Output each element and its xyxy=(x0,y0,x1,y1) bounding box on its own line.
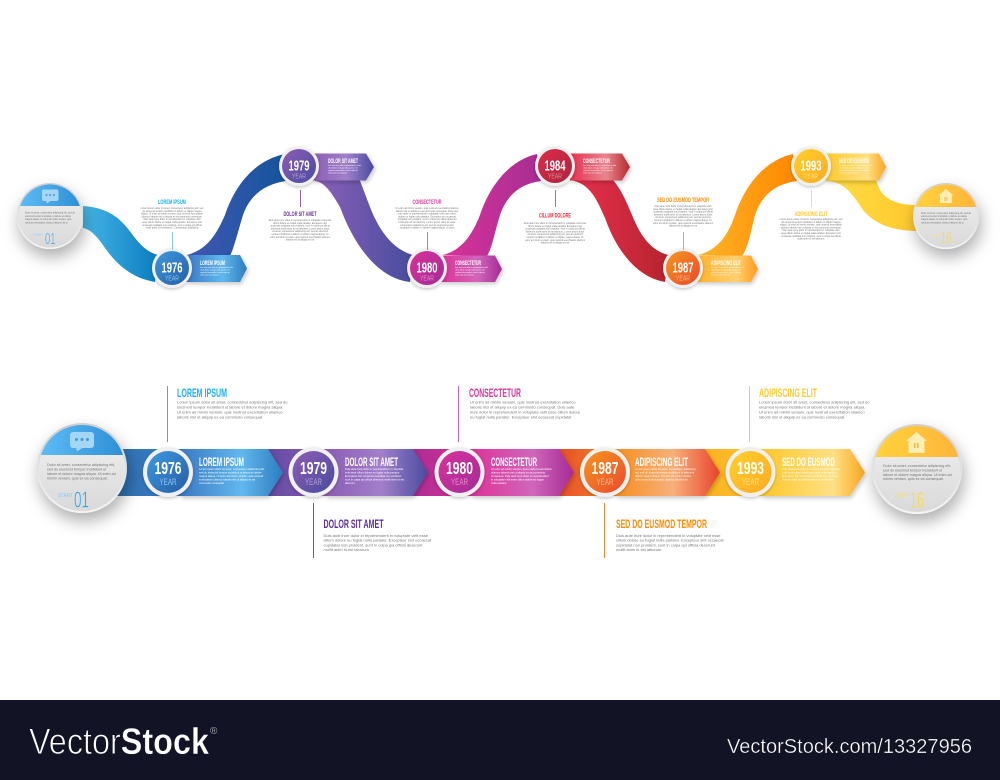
year node 1984: YEAR xyxy=(548,174,562,180)
arrow tag: dolor sit amet: DOLOR SIT AMET xyxy=(328,158,358,165)
label: dolor sit amet: cillum dolore eu fugiat nulla pariatur. Excepteur sint xyxy=(273,222,327,225)
callout: dolor sit amet: DOLOR SIT AMET xyxy=(324,517,384,531)
arrow tag: adipiscing elit: ADIPISCING ELIT xyxy=(711,260,741,267)
year node 1976 large: 1976 xyxy=(154,458,182,478)
arrow tag: consectetur: cillum dolore eu fugiat nulla pariatur sint xyxy=(455,268,485,272)
arrow: consectetur: nulla pariatur xyxy=(491,481,507,485)
end circle bottom: minim veniam, quis ex ea consequat. xyxy=(883,477,944,481)
end circle top: nostrud exercitation ullamco laboris nisi ut xyxy=(921,221,964,224)
label: dolor sit amet xyxy=(269,190,332,242)
label: consectetur xyxy=(395,199,459,250)
start circle bottom: sed do eiusmod tempor incididunt ut xyxy=(47,468,106,472)
label: consectetur: CONSECTETUR xyxy=(412,199,442,206)
end circle top: Dolor sit amet, consectetur adipiscing elit, sed do xyxy=(921,212,972,215)
year node 1979 large: YEAR xyxy=(305,477,322,487)
arrow tag: consectetur: cupidatat non proident, sunt in culpa qui xyxy=(455,271,485,274)
callout: dolor sit amet: cupidatat non proident, sunt in culpa qui officia deserunt xyxy=(324,542,423,548)
arrow tag: consectetur upper: mollit anim id est laborum xyxy=(583,172,603,174)
label: dolor sit amet: DOLOR SIT AMET xyxy=(284,211,317,218)
label: adipiscing elit: Lorem ipsum dolor sit amet, consectetur adipiscing elit, sed xyxy=(780,218,843,221)
start circle top: Dolor sit amet, consectetur adipiscing elit, sed do xyxy=(25,212,76,214)
label: dolor sit amet: occaecat cupidatat non proident, sunt in culpa qui officia xyxy=(270,225,330,228)
icon: speech bubble xyxy=(42,190,58,204)
arrow: adipiscing elit: quis nostrud exercitation ullamco laboris nisi xyxy=(635,478,688,482)
arrow tag: lorem ipsum xyxy=(186,255,247,282)
arrow tag: sed do eusmod: cillum dolore eu fugiat nulla pariatur sint xyxy=(839,166,869,170)
year node 1980 xyxy=(407,248,447,288)
label: lorem ipsum: do eiusmod tempor incididunt ut labore et dolore magna xyxy=(142,210,202,213)
label: sed do eusmod tempor: tempor incididunt ut labore et dolore magna aliqua. Ut xyxy=(655,219,712,222)
end circle top: euismod tempor incididunt ut labore et dolore xyxy=(921,215,968,218)
year node 1976: YEAR xyxy=(165,276,179,282)
label: lorem ipsum: occaecat cupidatat non proident, sunt in culpa qui officia xyxy=(142,224,202,227)
callout: lorem ipsum: laboris nisi ut aliquip ex ea commodo consequat. xyxy=(177,414,263,420)
label: sed do eusmod tempor: occaecat cupidatat non proident, sunt in culpa qui officia xyxy=(653,211,713,214)
callout: adipiscing elit: eiusmod tempor incididunt ut labore et dolore magna aliqua. xyxy=(759,404,865,410)
label: cillum dolore: occaecat cupidatat non proident, sunt in culpa qui officia xyxy=(525,228,585,231)
arrow: lorem ipsum: LOREM IPSUM xyxy=(199,457,244,469)
label: cillum dolore: laboris nisi ut aliquip ex ea xyxy=(541,242,570,245)
end circle bottom: sed do eiusmod tempor incididunt ut xyxy=(883,468,942,472)
arrow: lorem ipsum: Lorem ipsum dolor sit amet, consectetur adipiscing elit, xyxy=(199,467,265,471)
label: sed do eusmod tempor: Duis aute irure dolor in reprehenderit in voluptate velit xyxy=(655,205,712,208)
callout: lorem ipsum: eiusmod tempor incididunt ut labore et dolore magna aliqua. xyxy=(177,404,283,410)
arrow tag: dolor sit amet: Duis aute irure dolor in reprehenderit in velit xyxy=(328,164,361,167)
arrow: dolor sit amet xyxy=(325,449,428,496)
label: consectetur: mollit anim id est laborum. Lorem ipsum dolor sit amet, xyxy=(398,221,456,224)
callout: adipiscing elit: laboris nisi ut aliquip ex ea commodo consequat. xyxy=(759,414,845,420)
arrow: adipiscing elit xyxy=(616,449,720,496)
year node 1984: 1984 xyxy=(544,158,566,174)
arrow: sed do eusmod xyxy=(761,449,865,496)
callout: consectetur: eu fugiat nulla pariatur. Excepteur sint occaecat cupidatat xyxy=(470,414,572,420)
arrow tag: adipiscing elit: cupidatat non proident, sunt in culpa qui xyxy=(711,271,741,274)
arrow tag: dolor sit amet: cillum dolore eu fugiat nulla pariatur sint xyxy=(328,166,358,170)
start circle top: START xyxy=(33,233,44,237)
start circle bottom: Dolor sit amet, consectetur adipiscing elit, xyxy=(47,463,115,467)
label: consectetur: cupidatat non proident, sunt in culpa qui officia deserunt xyxy=(397,218,457,221)
year node 1980: YEAR xyxy=(420,276,434,282)
callout: lorem ipsum: Lorem ipsum dolor sit amet, consectetur adipiscing elit, sed do xyxy=(177,400,288,404)
arrow: lorem ipsum: exercitation ullamco laboris nisi ut aliquip ex ea xyxy=(199,478,256,482)
callout: consectetur: CONSECTETUR xyxy=(469,386,521,400)
label: cillum dolore: enim ad minim veniam, quis nostrud exercitation ullamco xyxy=(525,239,586,242)
callout: adipiscing elit: ADIPISCING ELIT xyxy=(759,386,817,400)
year node 1980: 1980 xyxy=(416,260,438,276)
label: dolor sit amet: deserunt mollit anim id est laborum. Lorem ipsum dolor xyxy=(271,227,329,230)
label: cillum dolore: sit amet, consectetur adipiscing elit, sed do eiusmod xyxy=(527,233,583,236)
label: sed do eusmod tempor: enim ad minim veniam, quis nostrud exercitation ullamco xyxy=(653,222,714,225)
label: lorem ipsum xyxy=(141,199,204,250)
year node 1987 large xyxy=(580,447,630,497)
arrow tag: consectetur upper xyxy=(570,154,630,180)
year node 1993 large xyxy=(726,447,776,497)
arrow: consectetur xyxy=(471,449,574,496)
arrow tag: consectetur: mollit anim id est laborum xyxy=(455,274,475,276)
label: adipiscing elit: Duis aute irure dolor in reprehenderit in voluptate velit xyxy=(783,229,840,232)
label: adipiscing elit: esse cillum dolore eu fugiat nulla pariatur. Excepteur sint xyxy=(781,232,841,235)
start circle top: magna aliqua. Ut enim ad minim veniam, quis xyxy=(25,218,72,221)
image id: VectorStock.com/13327956 xyxy=(727,735,972,758)
year node 1980 large xyxy=(434,447,484,497)
registered mark: ® xyxy=(210,726,218,737)
callout: lorem ipsum xyxy=(168,386,288,442)
label: dolor sit amet: Duis aute irure dolor in reprehenderit in voluptate velit esse xyxy=(269,219,332,222)
arrow tag: sed do eusmod: cupidatat non proident, sunt in culpa qui xyxy=(839,169,869,172)
start circle top: nostrud exercitation ullamco laboris nisi ut xyxy=(25,221,68,224)
label: lorem ipsum: mollit anim id est laborum. Consectetur adipiscing xyxy=(146,227,199,230)
label: consectetur: dolore eu fugiat nulla pariatur. Excepteur sint occaecat xyxy=(398,215,456,218)
year node 1979 xyxy=(279,146,319,186)
year node 1976: 1976 xyxy=(162,260,182,276)
end circle top: magna aliqua. Ut enim ad minim veniam, quis xyxy=(921,218,968,221)
arrow: consectetur: ullamco laboris nisi ut aliquip ex ea commodo xyxy=(491,470,546,474)
label: adipiscing elit: ullamco laboris nisi ut aliquip ex ea commodo consequat. xyxy=(781,226,842,229)
end circle bottom xyxy=(872,424,962,514)
callout: consectetur xyxy=(458,386,581,442)
label: consectetur: consectetur adipiscing elit, sed do eiusmod tempor xyxy=(400,224,454,227)
year node 1993: YEAR xyxy=(804,174,818,180)
winding ribbon path xyxy=(83,154,917,282)
arrow tag: lorem ipsum: Duis aute irure dolor in reprehenderit in velit xyxy=(200,266,233,269)
arrow: dolor sit amet: Excepteur sint occaecat cupidatat non proident, xyxy=(345,474,402,478)
arrow tag: consectetur upper: cillum dolore eu fugiat nulla pariatur sint xyxy=(583,166,613,170)
label: lorem ipsum: LOREM IPSUM xyxy=(158,199,186,206)
label: consectetur: incididunt ut labore et dolore magna aliqua. Ut enim xyxy=(400,227,454,230)
label: adipiscing elit: occaecat cupidatat non proident, sunt in culpa qui officia xyxy=(781,235,841,238)
year node 1979 large: 1979 xyxy=(300,458,327,478)
label: lorem ipsum: Duis aute irure dolor in reprehenderit in voluptate velit xyxy=(144,218,201,221)
year node 1984 xyxy=(535,146,575,186)
start circle bottom: 01 xyxy=(74,486,89,512)
arrow: lorem ipsum: sed do eiusmod tempor incididunt ut labore et dolore xyxy=(199,470,262,474)
arrow tag: adipiscing elit: mollit anim id est laborum xyxy=(711,274,731,276)
arrow tag: dolor sit amet: cupidatat non proident, sunt in culpa qui xyxy=(328,169,358,172)
label: dolor sit amet: laboris nisi ut aliquip ex ea xyxy=(286,239,315,242)
label: consectetur: Ut enim ad minim veniam, quis nostrud exercitation ullamco xyxy=(395,207,459,210)
arrow: consectetur: CONSECTETUR xyxy=(491,457,537,469)
label: adipiscing elit: aliqua. Ut enim ad minim veniam, quis nostrud exercitation xyxy=(780,224,843,227)
label: cillum dolore: CILLUM DOLORE xyxy=(539,212,571,220)
start circle bottom: minim veniam, quis ex ea consequat. xyxy=(47,476,108,480)
arrow: adipiscing elit: dolore magna aliqua. Ut enim ad minim veniam, xyxy=(635,474,692,478)
arrow tag: lorem ipsum: cupidatat non proident, sunt in culpa qui xyxy=(200,271,230,274)
callout: adipiscing elit xyxy=(750,386,870,442)
arrow tag: lorem ipsum: cillum dolore eu fugiat nulla pariatur sint xyxy=(200,268,230,272)
end circle top: 16 xyxy=(941,230,952,247)
label: lorem ipsum: Lorem ipsum dolor sit amet, consectetur adipiscing elit, sed xyxy=(141,207,204,210)
arrow tag: sed do eusmod: SED DO EUSMOD xyxy=(839,158,869,165)
arrow: consectetur: Ut enim ad minim veniam, quis nostrud exercitation xyxy=(491,467,552,471)
arrow tag: adipiscing elit: Duis aute irure dolor in reprehenderit in velit xyxy=(711,266,744,269)
arrow tag: consectetur upper: CONSECTETUR xyxy=(583,158,610,165)
top winding timeline xyxy=(17,146,979,288)
arrow: sed do eusmod: Excepteur sint occaecat cupidatat non proident, xyxy=(782,474,839,478)
year node 1976 xyxy=(152,248,192,288)
year node 1987 large: YEAR xyxy=(596,477,614,487)
arrow: consectetur: in voluptate velit esse cillum dolore eu fugiat xyxy=(491,478,544,482)
end circle bottom: 16 xyxy=(910,487,924,513)
callout: dolor sit amet xyxy=(314,503,432,558)
icon: house xyxy=(938,189,954,203)
callout: dolor sit amet: Duis aute irure dolor in reprehenderit in voluptate velit esse xyxy=(324,533,429,538)
arrow tag: lorem ipsum: mollit anim id est laborum xyxy=(200,274,220,276)
arrow: dolor sit amet: Duis aute irure dolor in reprehenderit in voluptate xyxy=(345,467,404,471)
arrow tag: adipiscing elit xyxy=(696,256,758,282)
arrow tag: consectetur: CONSECTETUR xyxy=(455,260,481,267)
year node 1987 large: 1987 xyxy=(592,458,618,478)
arrow: dolor sit amet: DOLOR SIT AMET xyxy=(345,457,398,469)
end circle bottom: Dolor sit amet, consectetur adipiscing elit, xyxy=(883,464,951,468)
icon: speech bubble large xyxy=(70,432,94,452)
label: adipiscing elit: mollit anim id est laborum. xyxy=(797,238,825,241)
arrow tag: consectetur upper: cupidatat non proident, sunt in culpa qui xyxy=(583,169,613,172)
callout: consectetur: laboris nisi ut aliquip ex ea commodo consequat. Duis aute xyxy=(470,404,575,410)
year node 1976 large: YEAR xyxy=(160,477,177,487)
arrow: lorem ipsum: commodo consequat xyxy=(199,481,224,485)
end circle top: END xyxy=(931,234,939,238)
arrow tag: dolor sit amet: mollit anim id est laborum xyxy=(328,172,348,174)
arrow: sed do eusmod: velit esse cillum dolore eu fugiat nulla pariatur. xyxy=(782,470,837,474)
arrow tag: sed do eusmod: mollit anim id est laborum xyxy=(839,172,859,174)
end circle bottom: labore et dolore magna aliqua. Ut enim ad xyxy=(883,473,952,477)
label: adipiscing elit: do eiusmod tempor incididunt ut labore et dolore magna xyxy=(781,221,841,224)
start circle bottom xyxy=(37,423,127,513)
label: sed do eusmod tempor: SED DO EUSMOD TEMPOR xyxy=(657,197,709,204)
arrow tag: consectetur: Duis aute irure dolor in reprehenderit in velit xyxy=(455,266,488,269)
year node 1980 large: YEAR xyxy=(451,477,468,487)
label: dolor sit amet: enim ad minim veniam, quis nostrud exercitation ullamco xyxy=(270,236,331,239)
arrow: dolor sit amet: velit esse cillum dolore eu fugiat nulla pariatur. xyxy=(345,470,400,474)
year node 1979: YEAR xyxy=(292,174,306,180)
arrow tag: consectetur xyxy=(441,256,502,282)
arrow tag: sed do eusmod xyxy=(824,154,886,180)
year node 1993: 1993 xyxy=(800,158,822,174)
label: adipiscing elit xyxy=(780,190,843,241)
arrow: sed do eusmod: Duis aute irure dolor in reprehenderit in voluptate xyxy=(782,467,841,471)
callout: consectetur: Ut enim ad minim veniam, quis nostrud exercitation ullamco xyxy=(470,400,576,404)
logo: VectorStock: VectorStock xyxy=(29,721,209,762)
year node 1993 large: 1993 xyxy=(737,458,764,478)
year node 1987: 1987 xyxy=(672,260,694,276)
label: lorem ipsum: aliqua. Ut enim ad minim veniam, quis nostrud exercitation xyxy=(141,213,204,216)
horizontal band xyxy=(110,449,766,496)
start circle top xyxy=(17,183,83,249)
arrow: sed do eusmod: sunt in culpa qui officia deserunt mollit anim xyxy=(782,478,835,482)
callout: sed do eusmod tempor: mollit anim id est laborum xyxy=(616,547,662,552)
arrow tag: consectetur upper: Duis aute irure dolor in reprehenderit in velit xyxy=(583,164,616,167)
label: cillum dolore: cillum dolore eu fugiat nulla pariatur. Excepteur sint xyxy=(528,225,582,228)
label: dolor sit amet: tempor incididunt ut labore et dolore magna aliqua. Ut xyxy=(272,233,329,236)
arrow tag: lorem ipsum: LOREM IPSUM xyxy=(200,260,225,267)
label: dolor sit amet: sit amet, consectetur adipiscing elit, sed do eiusmod xyxy=(272,230,328,233)
label: consectetur: laboris nisi ut aliquip ex ea commodo consequat. Duis aute xyxy=(396,210,459,213)
label: lorem ipsum: esse cillum dolore eu fugiat nulla pariatur. Excepteur sint xyxy=(142,221,202,224)
year node 1980 large: 1980 xyxy=(446,458,473,478)
start circle top: 01 xyxy=(45,231,56,248)
label: sed do eusmod tempor: esse cillum dolore eu fugiat nulla pariatur. Excepteur sint xyxy=(653,208,713,211)
label: cillum dolore: tempor incididunt ut labore et dolore magna aliqua. Ut xyxy=(527,236,584,239)
label: cillum dolore xyxy=(524,190,587,245)
callout: adipiscing elit: Ut enim ad minim veniam, quis nostrud exercitation ullamco xyxy=(759,410,865,414)
callout: sed do eusmod tempor: SED DO EUSMOD TEMPOR xyxy=(616,517,707,531)
arrow: sed do eusmod: SED DO EUSMOD xyxy=(782,457,835,469)
start circle top: euismod tempor incididunt ut labore et dolore xyxy=(25,215,72,218)
year node 1987: YEAR xyxy=(676,276,690,282)
label: cillum dolore: Duis aute irure dolor in reprehenderit in voluptate velit esse xyxy=(524,222,587,225)
callout: sed do eusmod tempor xyxy=(604,503,725,558)
callout: lorem ipsum: Ut enim ad minim veniam, quis nostrud exercitation ullamco xyxy=(177,410,283,414)
watermark footer bar xyxy=(0,700,1000,780)
label: cillum dolore: deserunt mollit anim id est laborum. Lorem ipsum dolor xyxy=(526,230,584,233)
callout: sed do eusmod tempor: cillum dolore eu fugiat nulla pariatur. Excepteur sint occaecat xyxy=(616,538,725,542)
year node 1993 large: YEAR xyxy=(742,477,759,487)
icon: house large xyxy=(906,432,927,453)
callout: adipiscing elit: Lorem ipsum dolor sit amet, consectetur adipiscing elit, sed do xyxy=(759,400,870,404)
arrow: consectetur: consequat. Duis aute irure dolor in reprehenderit xyxy=(491,474,549,478)
arrow: adipiscing elit: Lorem ipsum dolor sit amet, consectetur adipiscing xyxy=(635,467,696,471)
year node 1976 large xyxy=(143,447,193,497)
label: adipiscing elit: ADIPISCING ELIT xyxy=(794,211,828,218)
label: sed do eusmod tempor: laboris nisi ut aliquip ex ea xyxy=(669,225,698,228)
label: lorem ipsum: ullamco laboris nisi ut aliquip ex ea commodo consequat. xyxy=(142,215,203,218)
end circle bottom: END xyxy=(895,493,908,499)
start circle bottom: labore et dolore magna aliqua. Ut enim ad xyxy=(47,472,116,476)
arrow tag: dolor sit amet xyxy=(312,154,374,180)
label: sed do eusmod tempor: deserunt mollit anim id est laborum. Lorem ipsum dolor xyxy=(654,213,712,216)
year node 1993 xyxy=(791,146,831,186)
label: sed do eusmod tempor: sit amet, consectetur adipiscing elit, sed do eiusmod xyxy=(655,216,711,219)
arrow: dolor sit amet: laborum xyxy=(345,481,355,485)
label: consectetur: irure dolor in reprehenderit in voluptate velit esse cillum xyxy=(398,213,456,216)
arrow: lorem ipsum: magna aliqua. Ut enim ad minim veniam, quis nostrud xyxy=(199,474,264,478)
arrow: lorem ipsum xyxy=(180,449,283,496)
arrow tag: adipiscing elit: cillum dolore eu fugiat nulla pariatur sint xyxy=(711,268,741,272)
end circle top xyxy=(913,183,979,249)
callout: consectetur: irure dolor in reprehenderit in voluptate velit esse cillum dolore xyxy=(470,410,581,414)
arrow: adipiscing elit: ADIPISCING ELIT xyxy=(635,457,688,469)
year node 1979: 1979 xyxy=(288,158,310,174)
year node 1987 xyxy=(663,248,703,288)
year node 1979 large xyxy=(288,447,338,497)
callout: sed do eusmod tempor: cupidatat non proident, sunt in culpa qui officia deserunt xyxy=(616,542,716,548)
label: sed do eusmod tempor xyxy=(653,197,714,250)
bottom straight timeline xyxy=(37,386,962,558)
arrow: dolor sit amet: sunt in culpa qui officia deserunt mollit anim id est xyxy=(345,478,404,482)
callout: sed do eusmod tempor: Duis aute irure dolor in reprehenderit in voluptate velit esse xyxy=(616,533,721,538)
callout: dolor sit amet: mollit anim id est laborum xyxy=(324,547,370,552)
start circle bottom: START xyxy=(58,493,74,499)
arrow tag: sed do eusmod: Duis aute irure dolor in reprehenderit in velit xyxy=(839,164,872,167)
callout: lorem ipsum: LOREM IPSUM xyxy=(177,386,227,400)
callout: dolor sit amet: cillum dolore eu fugiat nulla pariatur. Excepteur sint occaecat xyxy=(324,538,432,542)
arrow: adipiscing elit: elit, sed do eiusmod tempor incididunt ut labore et xyxy=(635,470,695,474)
